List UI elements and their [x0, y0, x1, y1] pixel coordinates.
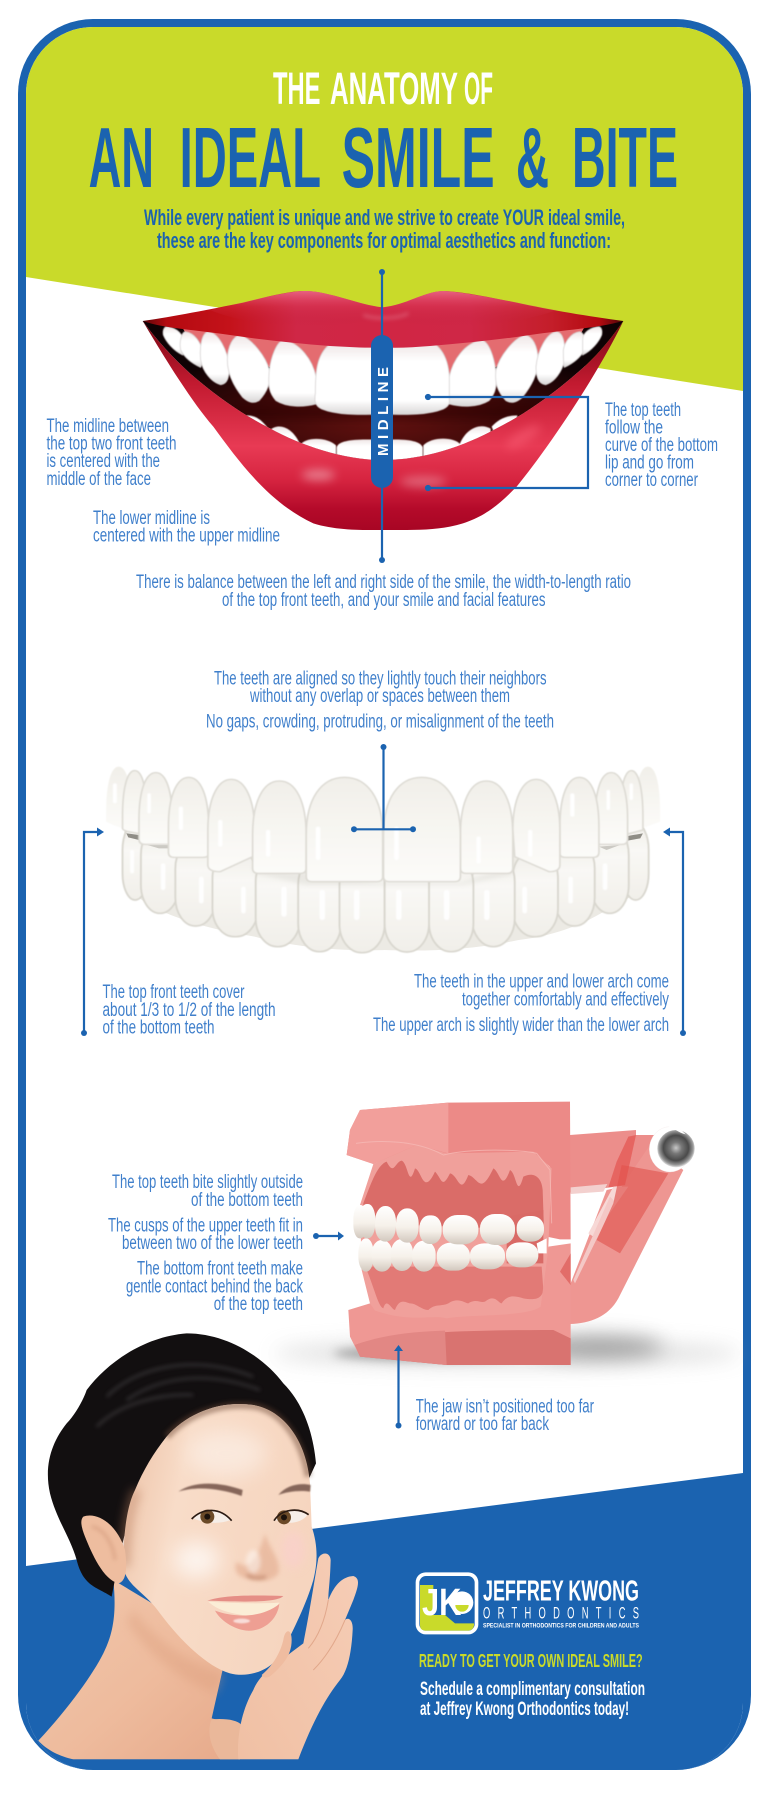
- heading: an ideal smile and bite: SMILE: [342, 111, 495, 206]
- logo mark: JK: [422, 1581, 462, 1624]
- text block: lower midline: centered with the upper midline: [93, 526, 280, 547]
- hair: [48, 1333, 316, 1597]
- upper teeth: [163, 327, 602, 414]
- upper arch: [106, 767, 660, 882]
- arrow: cusps double-headed: [313, 1232, 344, 1240]
- heading: an ideal smile and bite: IDEAL: [180, 111, 321, 206]
- arch base: [123, 830, 647, 951]
- text block: bite description: between two of the lower teeth: [122, 1233, 303, 1254]
- heading: the anatomy of: [273, 63, 493, 114]
- shadow under upper arch: [126, 833, 643, 885]
- logo: Jeffrey Kwong Orthodontics: [416, 1572, 640, 1634]
- heading: an ideal smile and bite: [89, 111, 678, 206]
- upper lip: [143, 291, 623, 348]
- text block: overbite: [102, 982, 276, 1039]
- lower arch: [123, 823, 649, 953]
- text block: bite description: The top teeth bite slightly outside: [112, 1172, 303, 1193]
- ear: [81, 1516, 126, 1583]
- text block: top teeth curve: [605, 400, 718, 491]
- heading: an ideal smile and bite: AN: [89, 111, 154, 206]
- callout: central tooth T marker: [351, 744, 416, 832]
- arrow: jaw position: [394, 1345, 403, 1428]
- lower block: [348, 1243, 571, 1365]
- call to action text: [420, 1679, 645, 1720]
- text block: top teeth curve: lip and go from: [605, 453, 694, 474]
- logo: Jeffrey Kwong Orthodontics: JEFFREY KWONG: [483, 1576, 639, 1608]
- arrow: arch fit right: [663, 828, 686, 1036]
- text block: lower midline: The lower midline is: [93, 508, 210, 529]
- text block: bite description: of the top teeth: [214, 1294, 303, 1315]
- nose: [235, 1533, 279, 1581]
- upper block: [347, 1102, 571, 1239]
- heading: an ideal smile and bite: BITE: [572, 111, 678, 206]
- text block: top teeth curve: corner to corner: [605, 470, 698, 491]
- ball joint: [649, 1125, 695, 1172]
- text block: midline between top teeth: the top two front teeth: [46, 434, 176, 455]
- text block: bite description: gentle contact behind the back: [126, 1277, 303, 1298]
- text block: jaw position: forward or too far back: [416, 1414, 549, 1435]
- lower teeth: [246, 414, 518, 460]
- text block: bite description: of the bottom teeth: [191, 1190, 303, 1211]
- lower lip: [143, 321, 623, 530]
- arrow: overbite left: [81, 828, 104, 1036]
- face: [123, 1404, 317, 1675]
- text block: midline between top teeth: [46, 416, 176, 490]
- text block: overbite: The top front teeth cover: [102, 982, 245, 1003]
- illustration: articulator jaw model: [273, 1102, 740, 1367]
- neck and shoulders: [38, 1580, 240, 1759]
- hand: [238, 1554, 358, 1759]
- illustration: front view of teeth arches: [106, 767, 660, 953]
- text block: bite description: The bottom front teeth make: [137, 1259, 303, 1280]
- jaw teeth: [353, 1204, 547, 1272]
- text block: smile balance: [136, 572, 631, 611]
- text block: bite description: The cusps of the upper teeth fit in: [108, 1216, 303, 1236]
- heading: an ideal smile and bite: &: [516, 111, 549, 206]
- text block: teeth alignment: without any overlap or spaces between them: [249, 686, 510, 707]
- text block: smile balance: of the top front teeth, and your smile and facial features: [222, 590, 546, 611]
- text: OF: [464, 63, 493, 114]
- illustration: smiling woman: [38, 1333, 358, 1759]
- text block: jaw position: [416, 1396, 594, 1435]
- eyebrows: [178, 1484, 311, 1496]
- jaw shadow: [273, 1335, 740, 1367]
- text block: overbite: about 1/3 to 1/2 of the length: [102, 1000, 276, 1021]
- text block: teeth alignment: The teeth are aligned so they lightly touch their neighbors: [214, 668, 546, 689]
- logo: Jeffrey Kwong Orthodontics: ORTHODONTICS: [483, 1604, 639, 1622]
- logo mark: [416, 1572, 478, 1634]
- text block: midline between top teeth: The midline between: [46, 416, 169, 437]
- text block: top teeth curve: follow the: [605, 417, 663, 438]
- text block: upper and lower arches: [373, 972, 669, 1036]
- text block: bite description: [108, 1172, 303, 1315]
- text block: midline between top teeth: middle of the face: [46, 469, 151, 490]
- logo: Jeffrey Kwong Orthodontics: SPECIALIST IN ORTHODONTICS FOR CHILDREN AND ADULTS: [483, 1622, 640, 1630]
- mouth: [207, 1595, 283, 1631]
- text block: upper and lower arches: together comfortably and effectively: [462, 990, 669, 1011]
- callout: midline marker: [371, 269, 393, 563]
- callout: midline marker: MIDLINE: [375, 367, 392, 456]
- callout: top teeth follow lower lip bracket: [426, 395, 588, 490]
- heading: the anatomy of: THE: [273, 63, 320, 114]
- heading: the anatomy of: ANATOMY: [330, 63, 458, 114]
- text block: lower midline: [93, 508, 280, 547]
- articulator arms: [560, 1130, 683, 1324]
- text block: top teeth curve: The top teeth: [605, 400, 681, 421]
- text block: introduction: [144, 205, 625, 253]
- text block: teeth alignment: No gaps, crowding, protruding, or misalignment of the teeth: [206, 712, 554, 733]
- illustration: smiling mouth: [143, 291, 623, 530]
- text block: top teeth curve: curve of the bottom: [605, 435, 718, 456]
- text block: midline between top teeth: is centered with the: [46, 451, 160, 472]
- text block: overbite: of the bottom teeth: [102, 1018, 214, 1039]
- eyes: [192, 1510, 309, 1524]
- text block: jaw position: The jaw isn’t positioned too far: [416, 1396, 594, 1417]
- call to action text: at Jeffrey Kwong Orthodontics today!: [420, 1699, 629, 1720]
- text block: teeth alignment: [206, 668, 554, 733]
- gum window: [356, 1142, 552, 1323]
